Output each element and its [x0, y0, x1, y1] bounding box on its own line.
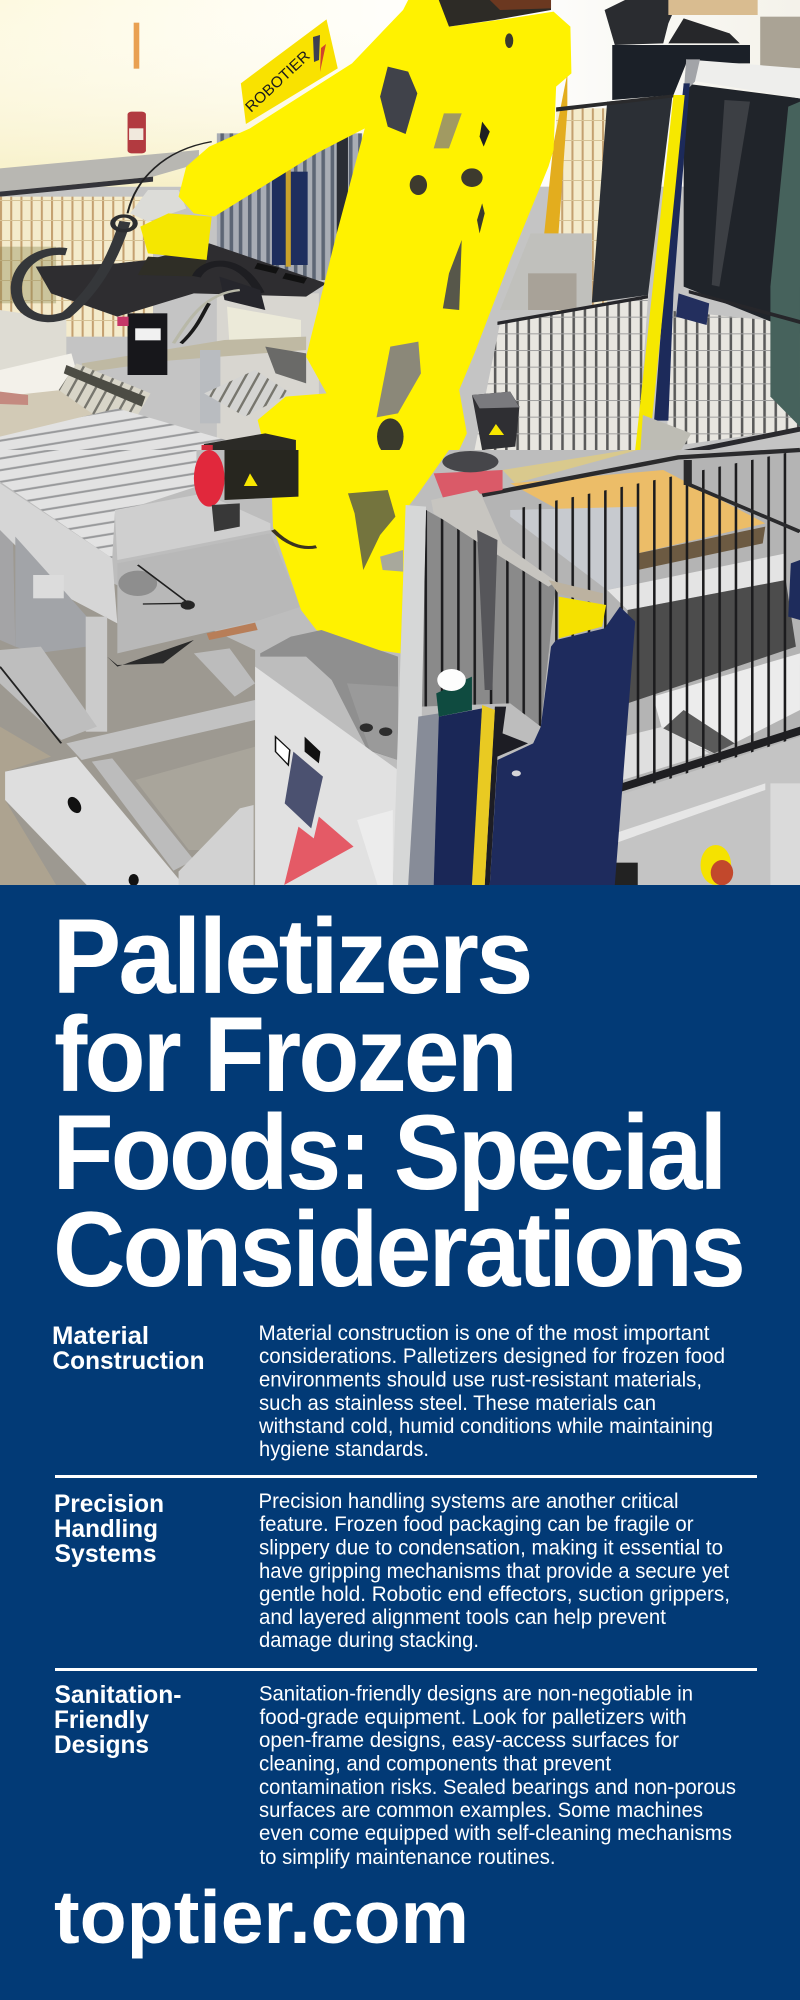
heading: Material Construction [52, 1322, 204, 1375]
heading: Precision Handling Systems: Systems [54, 1540, 156, 1568]
divider one [55, 1475, 757, 1478]
text: Sanitation-Friendly Designs body: Sanitation-friendly designs are non-negotiable in [259, 1682, 693, 1706]
text: Sanitation-Friendly Designs body: contamination risks. Sealed bearings and non-porous [259, 1776, 736, 1799]
heading: Sanitation-Friendly Designs [54, 1681, 182, 1759]
upper half of photo: wall, fencing and robot arm [0, 0, 800, 455]
heading: Precision Handling Systems: Precision [54, 1490, 164, 1518]
guarding post and near mesh [421, 510, 556, 727]
text: Material Construction body: hygiene standards. [259, 1438, 429, 1461]
text: Precision Handling Systems body: slippery due to condensation, making it essential to [259, 1536, 723, 1560]
text: Sanitation-Friendly Designs body: food-grade equipment. Look for palletizers with [260, 1706, 686, 1729]
right-hand area behind the mesh [477, 450, 800, 783]
title: Palletizers [52, 896, 530, 1016]
text: Material Construction body: considerations. Palletizers designed for frozen food [259, 1345, 725, 1368]
text: Sanitation-Friendly Designs body: to simplify maintenance routines. [260, 1846, 556, 1869]
divider two [55, 1668, 757, 1671]
section: Precision Handling Systems [54, 1490, 730, 1652]
heading: Material Construction: Construction [52, 1347, 204, 1375]
text: Precision Handling Systems body: and layered alignment tools can help prevent [259, 1606, 666, 1629]
text: Material Construction body: environments should use rust-resistant materials, [259, 1368, 702, 1392]
title: for Frozen [54, 994, 515, 1114]
heading: Precision Handling Systems: Handling [54, 1515, 158, 1543]
heading: Sanitation-Friendly Designs: Designs [54, 1731, 149, 1759]
text: Precision Handling Systems body: Precision handling systems are another critical [258, 1490, 678, 1513]
text: Precision Handling Systems body: feature. Frozen food packaging can be fragile or [260, 1513, 694, 1536]
website url: toptier.com [54, 1875, 469, 1959]
lower half of photo: conveyor, base, guarding [0, 450, 800, 886]
heading: Sanitation-Friendly Designs: Sanitation- [54, 1681, 182, 1709]
section: Sanitation-Friendly Designs [54, 1681, 736, 1869]
text: Precision Handling Systems body [258, 1490, 730, 1652]
text: Material Construction body: withstand cold, humid conditions while maintaining [258, 1415, 713, 1438]
text: Sanitation-Friendly Designs body: open-frame designs, easy-access surfaces for [259, 1729, 679, 1752]
robot arm label: ROBOTIER [242, 47, 314, 116]
text: Precision Handling Systems body: damage during stacking. [259, 1629, 479, 1652]
panel: navy text background [0, 885, 800, 2000]
base and hub of robot [270, 450, 449, 653]
text: Material Construction body [258, 1322, 725, 1461]
text: Precision Handling Systems body: have gripping mechanisms that provide a secure yet [259, 1560, 729, 1583]
text: Sanitation-Friendly Designs body: cleaning, and components that prevent [259, 1752, 611, 1776]
text: Sanitation-Friendly Designs body [259, 1682, 736, 1869]
title: Foods: Special [52, 1092, 724, 1212]
title [52, 896, 743, 1309]
title: Considerations [53, 1189, 743, 1309]
white pedestal with logo [255, 667, 398, 885]
guard shields [490, 607, 635, 885]
heading: Precision Handling Systems [54, 1490, 164, 1568]
robot arm body [179, 0, 571, 450]
text: Material Construction body: Material construction is one of the most important [258, 1322, 710, 1345]
heading: Material Construction: Material [52, 1322, 149, 1350]
text: Sanitation-Friendly Designs body: even come equipped with self-cleaning mechanisms [259, 1822, 732, 1845]
heading: Sanitation-Friendly Designs: Friendly [54, 1706, 149, 1734]
section: Material Construction [52, 1322, 725, 1461]
photo: robotic palletizer arm in a fenced cell [0, 0, 800, 886]
text: Precision Handling Systems body: gentle hold. Robotic end effectors, suction grippers, [259, 1583, 730, 1606]
text: Material Construction body: such as stainless steel. These materials can [259, 1392, 656, 1415]
robot arm label [242, 35, 326, 116]
text: Sanitation-Friendly Designs body: surfaces are common examples. Some machines [259, 1799, 703, 1822]
